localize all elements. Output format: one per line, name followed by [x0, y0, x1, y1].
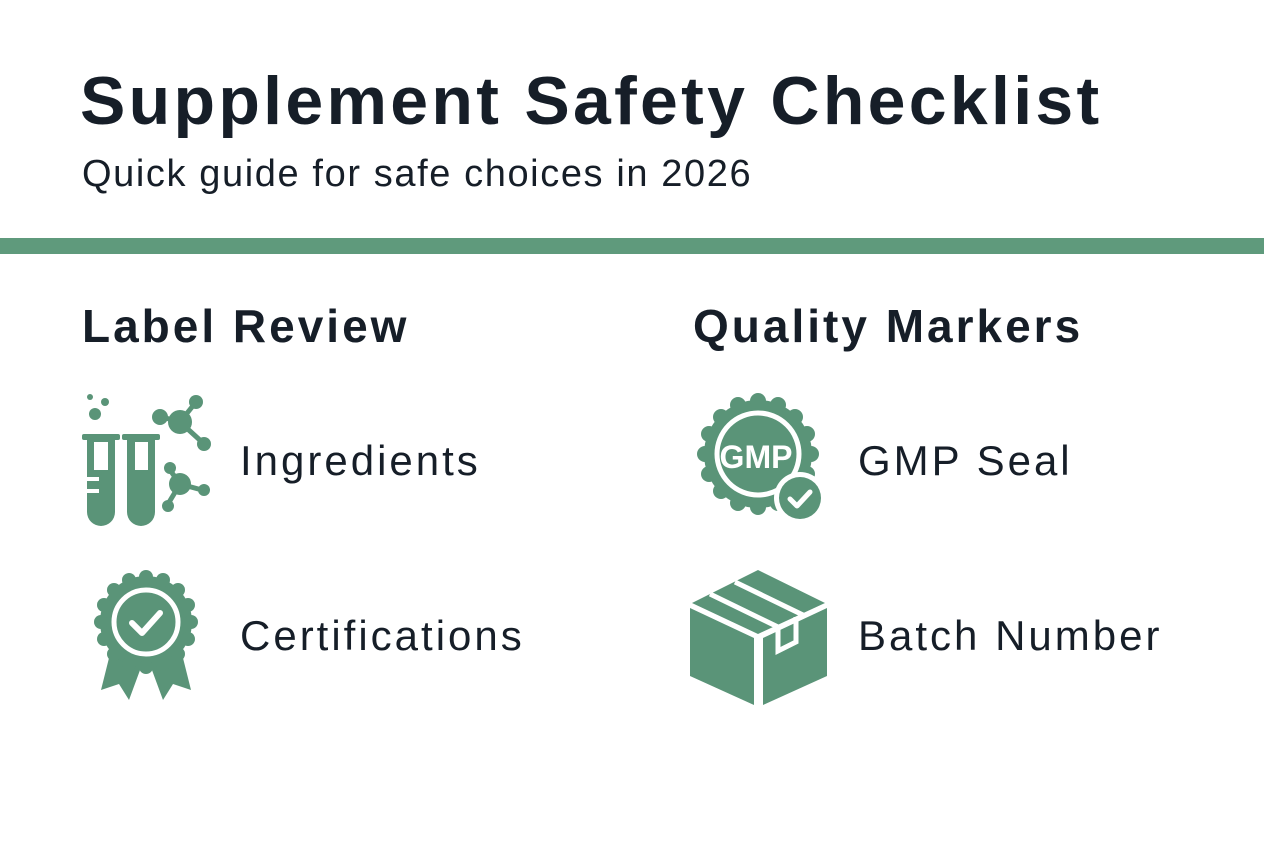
icon: GMP seal	[697, 393, 821, 519]
icon: box	[690, 570, 827, 705]
icon: certification ribbon	[94, 570, 198, 700]
title: Supplement Safety Checklist	[80, 63, 1102, 139]
text: Batch Number: Batch Number	[858, 612, 1162, 659]
icon: test tubes and molecules	[82, 394, 211, 526]
heading: Label Review: Label Review	[82, 300, 409, 352]
divider bar	[0, 238, 1264, 254]
text: GMP Seal: GMP Seal	[858, 437, 1073, 484]
subtitle: Quick guide for safe choices in 2026	[82, 153, 752, 195]
text: Ingredients: Ingredients	[240, 437, 481, 484]
icon: GMP seal: GMP	[720, 439, 792, 475]
text: Certifications: Certifications	[240, 612, 525, 659]
heading: Quality Markers: Quality Markers	[693, 300, 1083, 352]
